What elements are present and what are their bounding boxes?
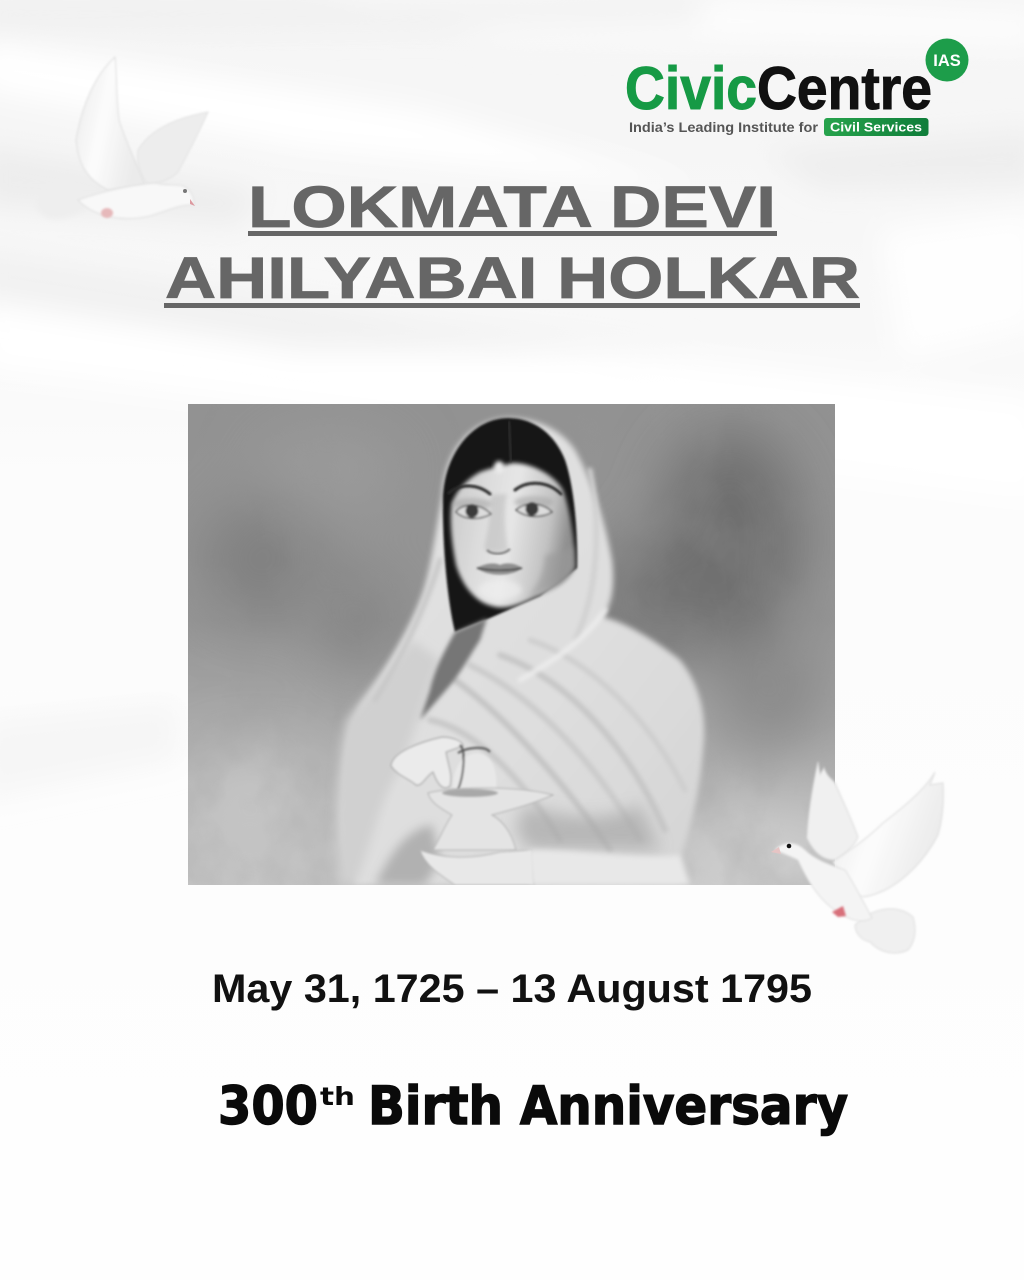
body: [78, 183, 194, 219]
logo wordmark: CivicCentre: [625, 55, 932, 122]
lips: [477, 563, 522, 575]
eyebrows: [449, 486, 490, 494]
hair parting: [509, 421, 511, 462]
beak: [190, 199, 195, 206]
lingam dome with leaves: [453, 745, 496, 790]
sari folds: [375, 470, 685, 850]
eye: [183, 189, 187, 193]
right eye: [516, 502, 552, 516]
front wing: [833, 772, 943, 897]
veil and body drape: [341, 418, 704, 885]
body: [775, 843, 872, 921]
beak: [771, 847, 781, 854]
title line one underline: [248, 231, 777, 236]
lower hand: [420, 850, 534, 885]
hazy lower-left drape: [337, 640, 440, 885]
Civil Services pill: [824, 118, 928, 136]
canvas texture: [188, 404, 835, 885]
right cheek shadow: [528, 545, 574, 598]
eye: [787, 844, 791, 848]
tail: [855, 909, 915, 953]
blouse at neck: [420, 618, 487, 720]
title: [164, 175, 860, 311]
nose: [484, 494, 510, 554]
dove top left: [36, 57, 208, 219]
upper hand: [391, 737, 463, 788]
hair: [443, 418, 577, 632]
life dates: May 31, 1725 – 13 August 1795: [212, 967, 812, 1011]
portrait of Ahilyabai Holkar: [180, 404, 840, 900]
left eye: [456, 504, 491, 518]
300th birth anniversary caption: 300: [218, 1076, 318, 1137]
IAS badge: [926, 38, 968, 82]
feet: [832, 906, 846, 917]
near wing: [76, 57, 145, 190]
tail feathers: [36, 177, 88, 219]
back wing: [807, 762, 858, 860]
title line two: AHILYABAI HOLKAR: [165, 246, 860, 311]
face: [451, 463, 575, 607]
IAS badge: IAS: [933, 52, 961, 70]
portrait backdrop: [188, 404, 835, 885]
Civic Centre IAS logo: [625, 38, 968, 136]
feet: [101, 208, 113, 218]
Civil Services pill: Civil Services: [830, 120, 922, 134]
logo tagline: India’s Leading Institute for: [629, 120, 819, 135]
dove bottom right: [771, 762, 943, 953]
bindi: [494, 461, 504, 473]
portrait subject with shaded details: [188, 414, 835, 885]
title line one: LOKMATA DEVI: [248, 175, 776, 240]
eye socket shading: [452, 496, 554, 510]
sleeve: [528, 850, 690, 885]
mottled background shadows: [180, 430, 840, 900]
300th birth anniversary caption: th: [320, 1082, 355, 1111]
300th birth anniversary caption: Birth Anniversary: [368, 1076, 848, 1137]
title line two underline: [164, 303, 860, 308]
offering vessel: [428, 788, 553, 850]
shadow beneath vessel: [515, 805, 660, 850]
chin highlight: [478, 580, 522, 600]
far wing: [138, 112, 208, 184]
